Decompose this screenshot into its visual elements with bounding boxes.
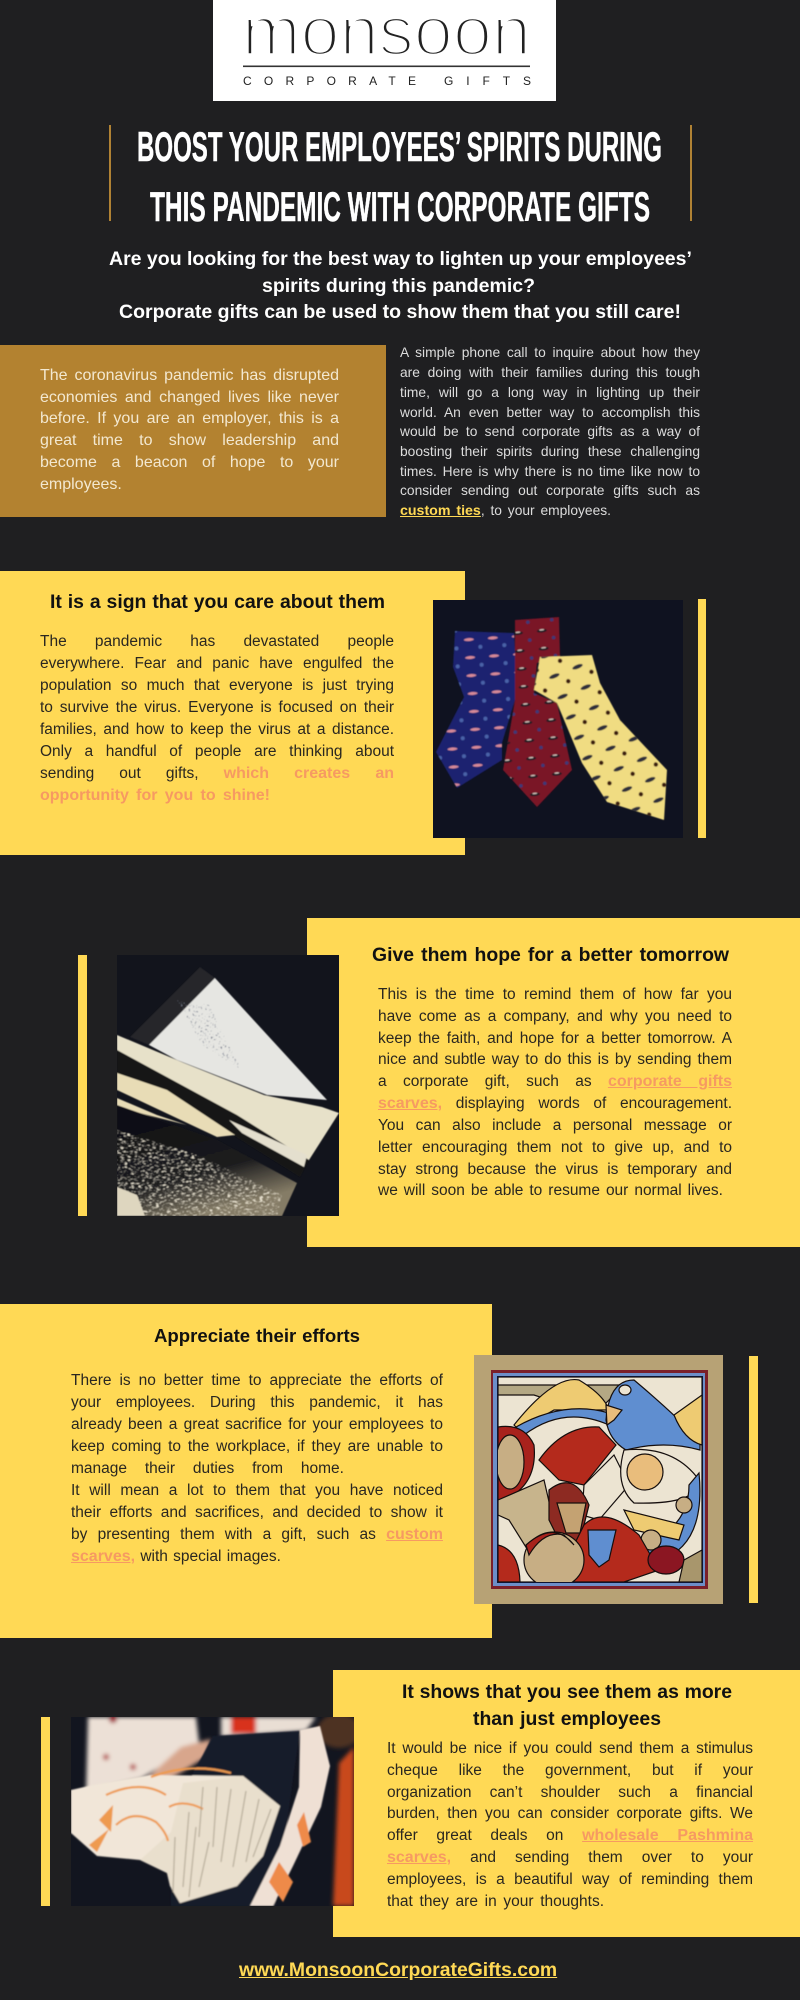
- panel: appreciate their efforts: [0, 1304, 492, 1638]
- text: paragraph: a corporate gift, such as corporate gifts: [378, 1073, 732, 1090]
- text: paragraph: manage their duties from home.: [71, 1460, 344, 1477]
- photo: three ties: [433, 600, 683, 838]
- heading: Give them hope for a better tomorrow: [372, 944, 729, 966]
- accent bar: [78, 955, 87, 1216]
- text: paragraph: The pandemic has devastated people: [40, 633, 394, 650]
- text: paragraph: [71, 1372, 443, 1565]
- intro heading: Corporate gifts can be used to show them that you still care!: [119, 301, 681, 323]
- text: paragraph: nice and subtle way to do this is by sending them: [378, 1051, 732, 1068]
- accent bar: [749, 1356, 758, 1603]
- accent bar: [41, 1717, 50, 1906]
- text: paragraph: scarves, and sending them over to your: [387, 1849, 753, 1866]
- text: intro right paragraph: A simple phone call to inquire about how they: [400, 345, 700, 360]
- text: paragraph: already been a great sacrifice for your employees to: [71, 1416, 443, 1433]
- text: paragraph: [378, 986, 732, 1199]
- text: paragraph: burden, then you can consider corporate gifts. We: [387, 1805, 753, 1822]
- text: paragraph: families, and how to keep the virus at a distance.: [40, 721, 394, 738]
- text: paragraph: keep the faith, and hope for a better tomorrow. A: [378, 1030, 732, 1047]
- text: intro right paragraph: time, will go a long way in lighting up their: [400, 385, 700, 400]
- text: paragraph: everywhere. Fear and panic have engulfed the: [40, 655, 394, 672]
- panel: more than just employees: [333, 1670, 800, 1937]
- text: intro right paragraph: are doing with their families during this tough: [400, 365, 700, 380]
- text: paragraph: scarves, displaying words of encouragement.: [378, 1095, 732, 1112]
- text: gold panel paragraph: become a beacon of hope to your: [40, 454, 339, 471]
- text: intro right paragraph: [400, 345, 700, 519]
- text: intro right paragraph: world. An even better way to accomplish this: [400, 405, 700, 420]
- text: paragraph: that they are in your thoughts.: [387, 1893, 604, 1910]
- text: paragraph: sending out gifts, which creates an: [40, 765, 394, 782]
- text: paragraph: letter encouraging them not to give up, and to: [378, 1139, 732, 1156]
- text: gold panel paragraph: [40, 367, 340, 493]
- logo: [213, 0, 556, 101]
- panel: sign that you care: [0, 571, 465, 855]
- text: intro right paragraph: times. Here is why there is no time like now to: [400, 464, 700, 479]
- text: paragraph: [40, 633, 394, 804]
- panel: hope for tomorrow: [307, 918, 800, 1247]
- text: paragraph: cheque like the government, but if your: [387, 1762, 753, 1779]
- heading: It shows that you see them as more: [402, 1681, 732, 1703]
- text: gold panel paragraph: economies and changed lives like never: [40, 389, 339, 406]
- text: paragraph: by presenting them with a gift, such as custom: [71, 1526, 443, 1543]
- text: paragraph: keep coming to the workplace, if they are unable to: [71, 1438, 443, 1455]
- text: paragraph: we will soon be able to resume our normal lives.: [378, 1182, 723, 1199]
- logo: GIFTS: [444, 74, 531, 88]
- text: paragraph: opportunity for you to shine!: [40, 787, 270, 804]
- text: paragraph: organization can’t shoulder such a financial: [387, 1784, 753, 1801]
- text: paragraph: have come as a company, and why you need to: [378, 1008, 732, 1025]
- text: paragraph: It would be nice if you could send them a stimulus: [387, 1740, 753, 1757]
- intro heading: Are you looking for the best way to lighten up your employees’: [109, 248, 692, 270]
- footer website link: www.MonsoonCorporateGifts.com: [239, 1959, 557, 1981]
- text: gold panel paragraph: before. If you are an employer, this is a: [40, 410, 339, 427]
- photo: pashmina shawls: [71, 1717, 354, 1906]
- text: paragraph: This is the time to remind them of how far you: [378, 986, 732, 1003]
- text: paragraph: their efforts and sacrifices, and decided to show it: [71, 1504, 443, 1521]
- text: paragraph: scarves, with special images.: [71, 1548, 281, 1565]
- text: paragraph: Only a handful of people are thinking about: [40, 743, 394, 760]
- text: paragraph: stay strong because the virus is temporary and: [378, 1161, 732, 1178]
- text: gold panel paragraph: employees.: [40, 476, 122, 493]
- text: paragraph: You can also include a personal message or: [378, 1117, 732, 1134]
- text: paragraph: to survive the virus. Everyone is focused on their: [40, 699, 394, 716]
- heading: Appreciate their efforts: [154, 1325, 360, 1346]
- heading: [402, 1681, 732, 1730]
- panel: gold intro: [0, 345, 386, 517]
- text: paragraph: [387, 1740, 754, 1910]
- text: intro right paragraph: boosting their spirits during these challenging: [400, 444, 700, 459]
- photo: black and cream scarf: [117, 955, 339, 1216]
- text: intro right paragraph: consider sending out corporate gifts such as: [400, 483, 700, 498]
- text: paragraph: It will mean a lot to them that you have noticed: [71, 1482, 443, 1499]
- text: paragraph: employees, is a beautiful way of reminding them: [387, 1871, 753, 1888]
- intro heading: spirits during this pandemic?: [262, 275, 535, 297]
- intro heading: [109, 248, 692, 323]
- text: intro right paragraph: would be to send corporate gifts as a way of: [400, 424, 700, 439]
- heading: It is a sign that you care about them: [50, 591, 385, 613]
- text: paragraph: population so much that everyone is just trying: [40, 677, 394, 694]
- heading: than just employees: [473, 1708, 661, 1730]
- photo: illustrated scarf: [474, 1355, 723, 1604]
- logo: CORPORATE: [243, 74, 416, 88]
- text: paragraph: your employees. During this pandemic, it has: [71, 1394, 443, 1411]
- text: gold panel paragraph: great time to show leadership and: [40, 432, 339, 449]
- accent bar: [698, 599, 706, 838]
- text: gold panel paragraph: The coronavirus pandemic has disrupted: [40, 367, 339, 384]
- text: paragraph: There is no better time to appreciate the efforts of: [71, 1372, 443, 1389]
- title: [109, 124, 692, 222]
- text: paragraph: offer great deals on wholesale Pashmina: [387, 1827, 753, 1844]
- text: intro right paragraph: custom ties, to your employees.: [400, 503, 611, 519]
